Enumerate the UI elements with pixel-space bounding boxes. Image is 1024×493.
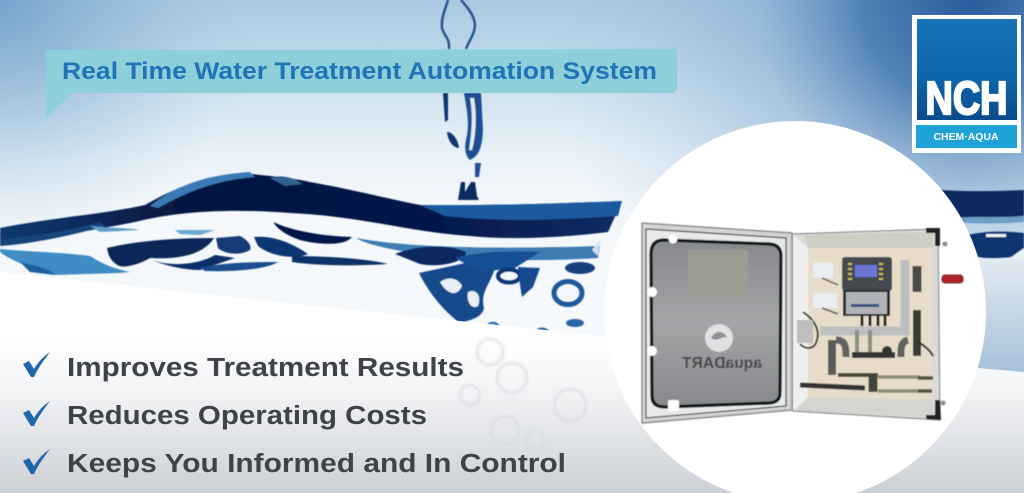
product: open control cabinet (642, 223, 963, 423)
plumbing (800, 260, 933, 392)
title banner (46, 49, 677, 119)
water pour stream (442, 0, 483, 200)
red valve (942, 275, 963, 283)
title: Real Time Water Treatment Automation System (62, 58, 657, 85)
white lower area (0, 272, 1024, 493)
rings and droplets (498, 270, 520, 282)
NCH Chem-Aqua logo: NCH (926, 72, 1008, 124)
NCH Chem-Aqua logo: CHEM·AQUA (934, 131, 999, 143)
controller (842, 257, 892, 291)
benefit 2: Reduces Operating Costs (67, 402, 427, 430)
NCH Chem-Aqua logo (912, 15, 1021, 153)
pale blue panel at right edge (970, 257, 1024, 375)
faint bubbles under surface (459, 339, 586, 476)
benefit 3: Keeps You Informed and In Control (67, 450, 566, 478)
plume (419, 262, 495, 323)
benefits list (23, 352, 566, 478)
cabinet interior (793, 228, 963, 420)
water surface at far right (940, 190, 1024, 258)
benefit 1: Improves Treatment Results (67, 354, 464, 382)
brand text on door (mirrored): aquaDART (682, 355, 762, 372)
under-surface pool, left (0, 249, 130, 275)
water surface wave (0, 172, 622, 332)
cabinet door (642, 223, 792, 423)
circular product backdrop (604, 121, 986, 493)
dark lenses (107, 238, 214, 266)
